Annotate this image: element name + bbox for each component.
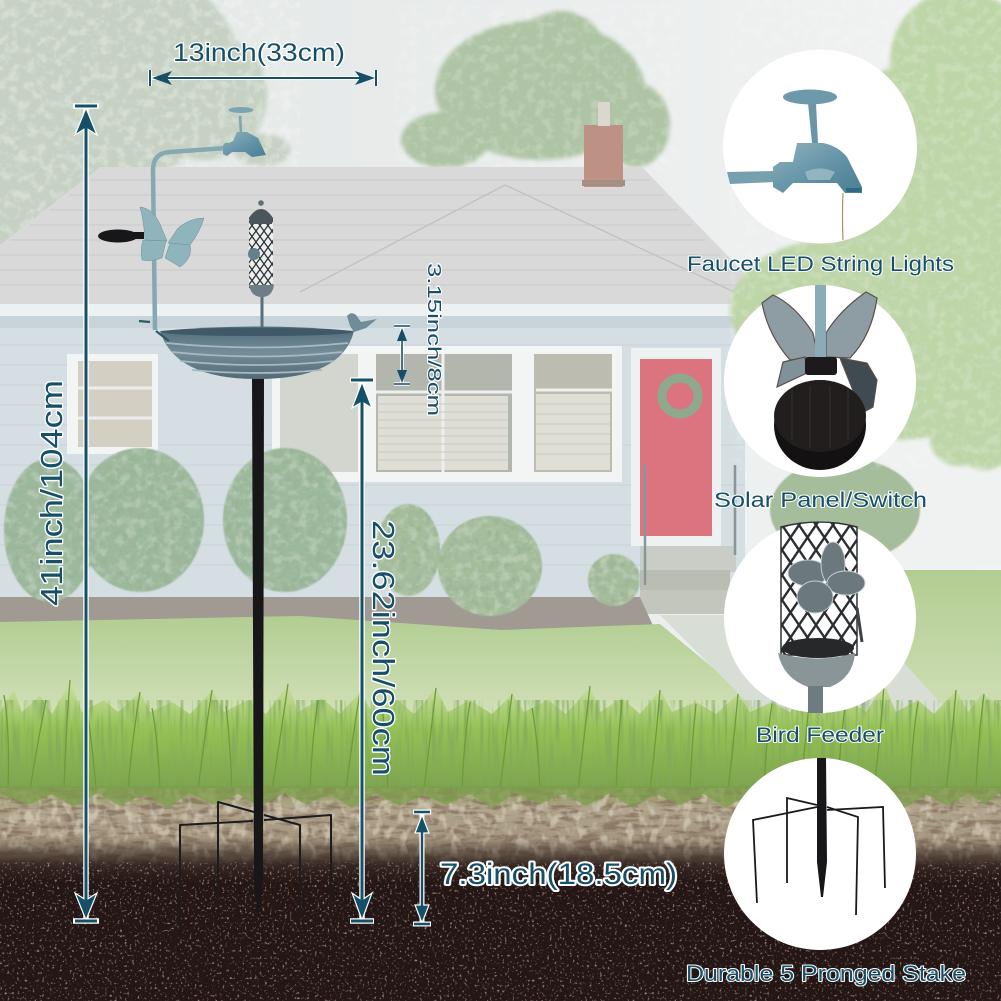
small bird <box>347 313 377 332</box>
dimension arrow: pole height <box>350 380 374 921</box>
icon: solar panel <box>774 357 866 470</box>
faucet <box>223 107 266 157</box>
text: 23.62inch/60cm: 23.62inch/60cm <box>366 520 401 776</box>
dimension arrow: width 13 inch <box>150 70 376 86</box>
circle: durable stake detail <box>724 758 916 950</box>
background: chimney <box>582 102 625 187</box>
icon: butterfly wings <box>762 292 877 413</box>
background: roof <box>0 167 775 305</box>
stake prongs <box>180 802 331 923</box>
background: picture window <box>272 346 622 482</box>
background: red door <box>631 348 721 546</box>
background: grass band <box>0 680 1001 800</box>
dimension arrow: basin depth <box>394 326 410 384</box>
background: house wall <box>0 314 745 604</box>
circle: faucet LED string lights detail <box>723 50 917 244</box>
faucet arm <box>153 148 226 330</box>
label: Bird Feeder: Bird Feeder <box>756 723 884 747</box>
solar light <box>98 230 144 242</box>
text: 13inch(33cm): 13inch(33cm) <box>173 39 345 67</box>
background: front steps <box>640 465 736 614</box>
arm clip <box>139 321 169 341</box>
icon: faucet close-up <box>727 90 862 240</box>
product: bird bath stake with faucet arm <box>98 107 377 923</box>
label: Solar Panel/Switch: Solar Panel/Switch <box>714 488 927 512</box>
background: straw root layer <box>0 786 1001 883</box>
label: Durable 5 Pronged Stake: Durable 5 Pronged Stake <box>686 961 966 986</box>
circle: bird feeder detail <box>724 521 916 713</box>
dimension arrow: total height 41 inch <box>73 106 99 921</box>
text: 3.15inch/8cm: 3.15inch/8cm <box>424 263 444 416</box>
background: right tree <box>730 0 1001 470</box>
icon: mesh feeder <box>778 522 865 713</box>
dimension arrow: stake depth <box>413 812 431 924</box>
butterfly <box>140 207 204 267</box>
background: centre tree <box>395 5 680 170</box>
background: right house <box>930 430 1001 565</box>
icon: pole <box>815 285 826 363</box>
background: lawn <box>0 616 770 715</box>
text: 7.3inch(18.5cm): 7.3inch(18.5cm) <box>440 858 677 891</box>
background: left tree <box>0 0 300 260</box>
basin <box>160 326 354 379</box>
background: mulch bed <box>0 597 655 630</box>
label: Faucet LED String Lights: Faucet LED String Lights <box>687 252 954 276</box>
hanging bird feeder <box>248 200 274 328</box>
pole <box>252 378 264 922</box>
icon: five pronged stake <box>753 758 885 915</box>
background: left window <box>67 354 158 454</box>
background: dark soil <box>0 838 1001 1001</box>
text: 41inch/104cm: 41inch/104cm <box>34 380 69 606</box>
background: shrubs <box>0 440 920 620</box>
circle: solar panel and switch detail <box>724 285 916 477</box>
